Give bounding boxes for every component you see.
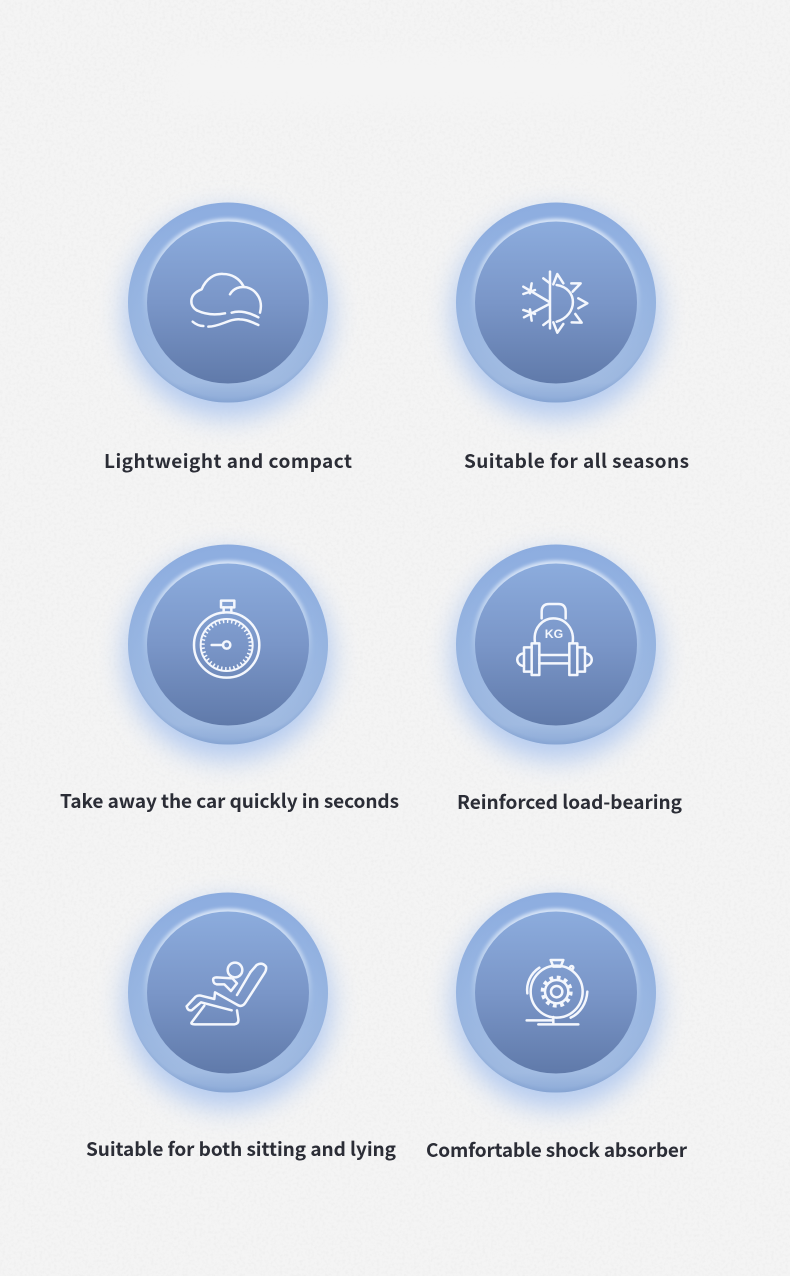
label: Comfortable shock absorber: [426, 1136, 688, 1163]
panel: suitable for all seasons: [452, 202, 689, 474]
icon: snowflake and sun: [523, 272, 587, 333]
button: cloud: [124, 202, 332, 418]
label: Suitable for all seasons: [464, 447, 689, 474]
button: season: [452, 202, 660, 418]
icon: reclining seat: [187, 963, 266, 1024]
label: Lightweight and compact: [104, 447, 352, 474]
label: Take away the car quickly in seconds: [60, 787, 399, 814]
panel: lightweight and compact: [104, 202, 352, 474]
button: seat: [124, 892, 332, 1108]
panel: reinforced load-bearing: [452, 544, 683, 815]
icon: kettlebell and dumbbell: KG: [545, 627, 563, 641]
icon: cloud over waves: [191, 274, 261, 327]
label: Suitable for both sitting and lying: [86, 1135, 397, 1162]
label: Reinforced load-bearing: [457, 788, 683, 815]
icon: stopwatch: [194, 601, 259, 678]
button: weight: [452, 544, 660, 760]
panel: take away quickly: [60, 544, 399, 814]
panel: sitting and lying: [86, 892, 397, 1162]
button: stopwatch: [124, 544, 332, 760]
icon: shock absorber gear: [527, 960, 587, 1024]
icon: kettlebell and dumbbell: [517, 604, 592, 675]
panel: comfortable shock absorber: [426, 892, 688, 1163]
button: shock: [452, 892, 660, 1108]
